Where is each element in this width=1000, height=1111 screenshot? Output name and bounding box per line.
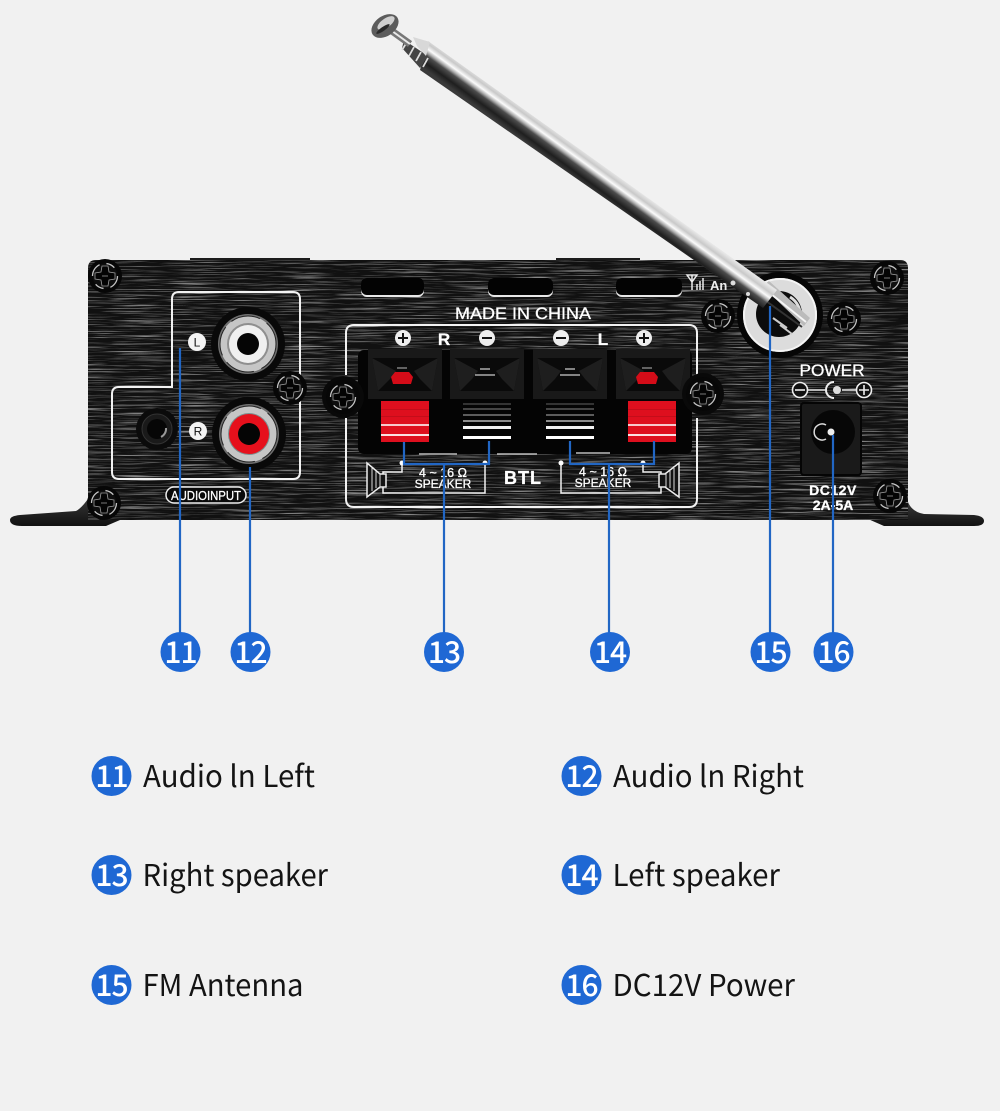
legend: 16 DC12V Power: DC12V Power xyxy=(612,961,795,1005)
R badge: R xyxy=(194,424,203,438)
callout 12: 12 xyxy=(234,628,267,672)
antenna label xyxy=(687,275,727,293)
polarity markers xyxy=(395,330,652,349)
speaker panel outline xyxy=(346,325,697,507)
callout 11: 11 xyxy=(164,628,197,672)
RCA jack right xyxy=(212,397,286,471)
antenna label: An xyxy=(710,278,727,293)
DC rating text xyxy=(809,482,857,513)
made in china text: MADE IN CHINA xyxy=(455,304,592,323)
right speaker wiring: 4 ~ 16 Ω xyxy=(419,466,467,480)
RCA jack left xyxy=(211,307,285,381)
left mounting foot xyxy=(10,496,120,526)
DC rating text: DC12V xyxy=(809,482,857,498)
legend: 15 FM Antenna: FM Antenna xyxy=(142,961,304,1005)
right mounting foot xyxy=(868,502,984,526)
BTL text: BTL xyxy=(504,468,542,488)
left speaker wiring: 4 ~ 16 Ω xyxy=(579,465,627,479)
left speaker wiring: SPEAKER xyxy=(575,476,632,490)
L badge xyxy=(188,333,206,351)
DC power jack xyxy=(801,403,861,475)
legend: 13 Right speaker: Right speaker xyxy=(142,851,328,895)
corner screws xyxy=(87,259,907,520)
power label: POWER xyxy=(800,361,864,380)
antenna socket xyxy=(737,272,823,358)
speaker terminal block xyxy=(358,349,692,454)
panel screws beside speakers xyxy=(322,373,724,418)
polarity markers: L xyxy=(598,330,608,349)
screw: audio panel xyxy=(273,371,307,405)
DC rating text: 2A-5A xyxy=(813,497,853,513)
R badge xyxy=(189,422,207,440)
legend: 13 Right speaker: 13 xyxy=(95,851,128,895)
legend: 14 Left speaker: Left speaker xyxy=(612,851,780,895)
legend: 16 DC12V Power: 16 xyxy=(565,961,598,1005)
legend: 15 FM Antenna: 15 xyxy=(95,961,128,1005)
L badge: L xyxy=(194,336,201,350)
callout 14: 14 xyxy=(594,628,627,672)
metal faceplate xyxy=(88,258,908,520)
callout 13: 13 xyxy=(428,628,460,672)
callout 16: 16 xyxy=(817,628,850,672)
legend: 14 Left speaker: 14 xyxy=(565,851,598,895)
audio input label: AUDIOINPUT xyxy=(171,488,241,503)
antenna screws xyxy=(701,299,861,336)
legend: 12 Audio In Right: 12 xyxy=(565,752,598,796)
legend: 12 Audio In Right: Audio ln Right xyxy=(613,752,804,796)
leader lines xyxy=(180,306,833,635)
amplifier rear panel xyxy=(10,258,984,526)
aux jack xyxy=(136,408,178,450)
polarity symbol xyxy=(792,382,872,398)
telescopic antenna xyxy=(367,9,810,327)
vent slots xyxy=(361,278,682,297)
audio input outline xyxy=(112,292,300,479)
right speaker wiring xyxy=(367,460,488,497)
left speaker wiring xyxy=(558,460,679,497)
legend: 11 Audio In Left: Audio ln Left xyxy=(143,752,315,796)
right speaker wiring: SPEAKER xyxy=(415,477,472,491)
callout 15: 15 xyxy=(754,628,787,672)
polarity markers: R xyxy=(438,330,450,349)
legend: 11 Audio In Left: 11 xyxy=(95,752,128,796)
